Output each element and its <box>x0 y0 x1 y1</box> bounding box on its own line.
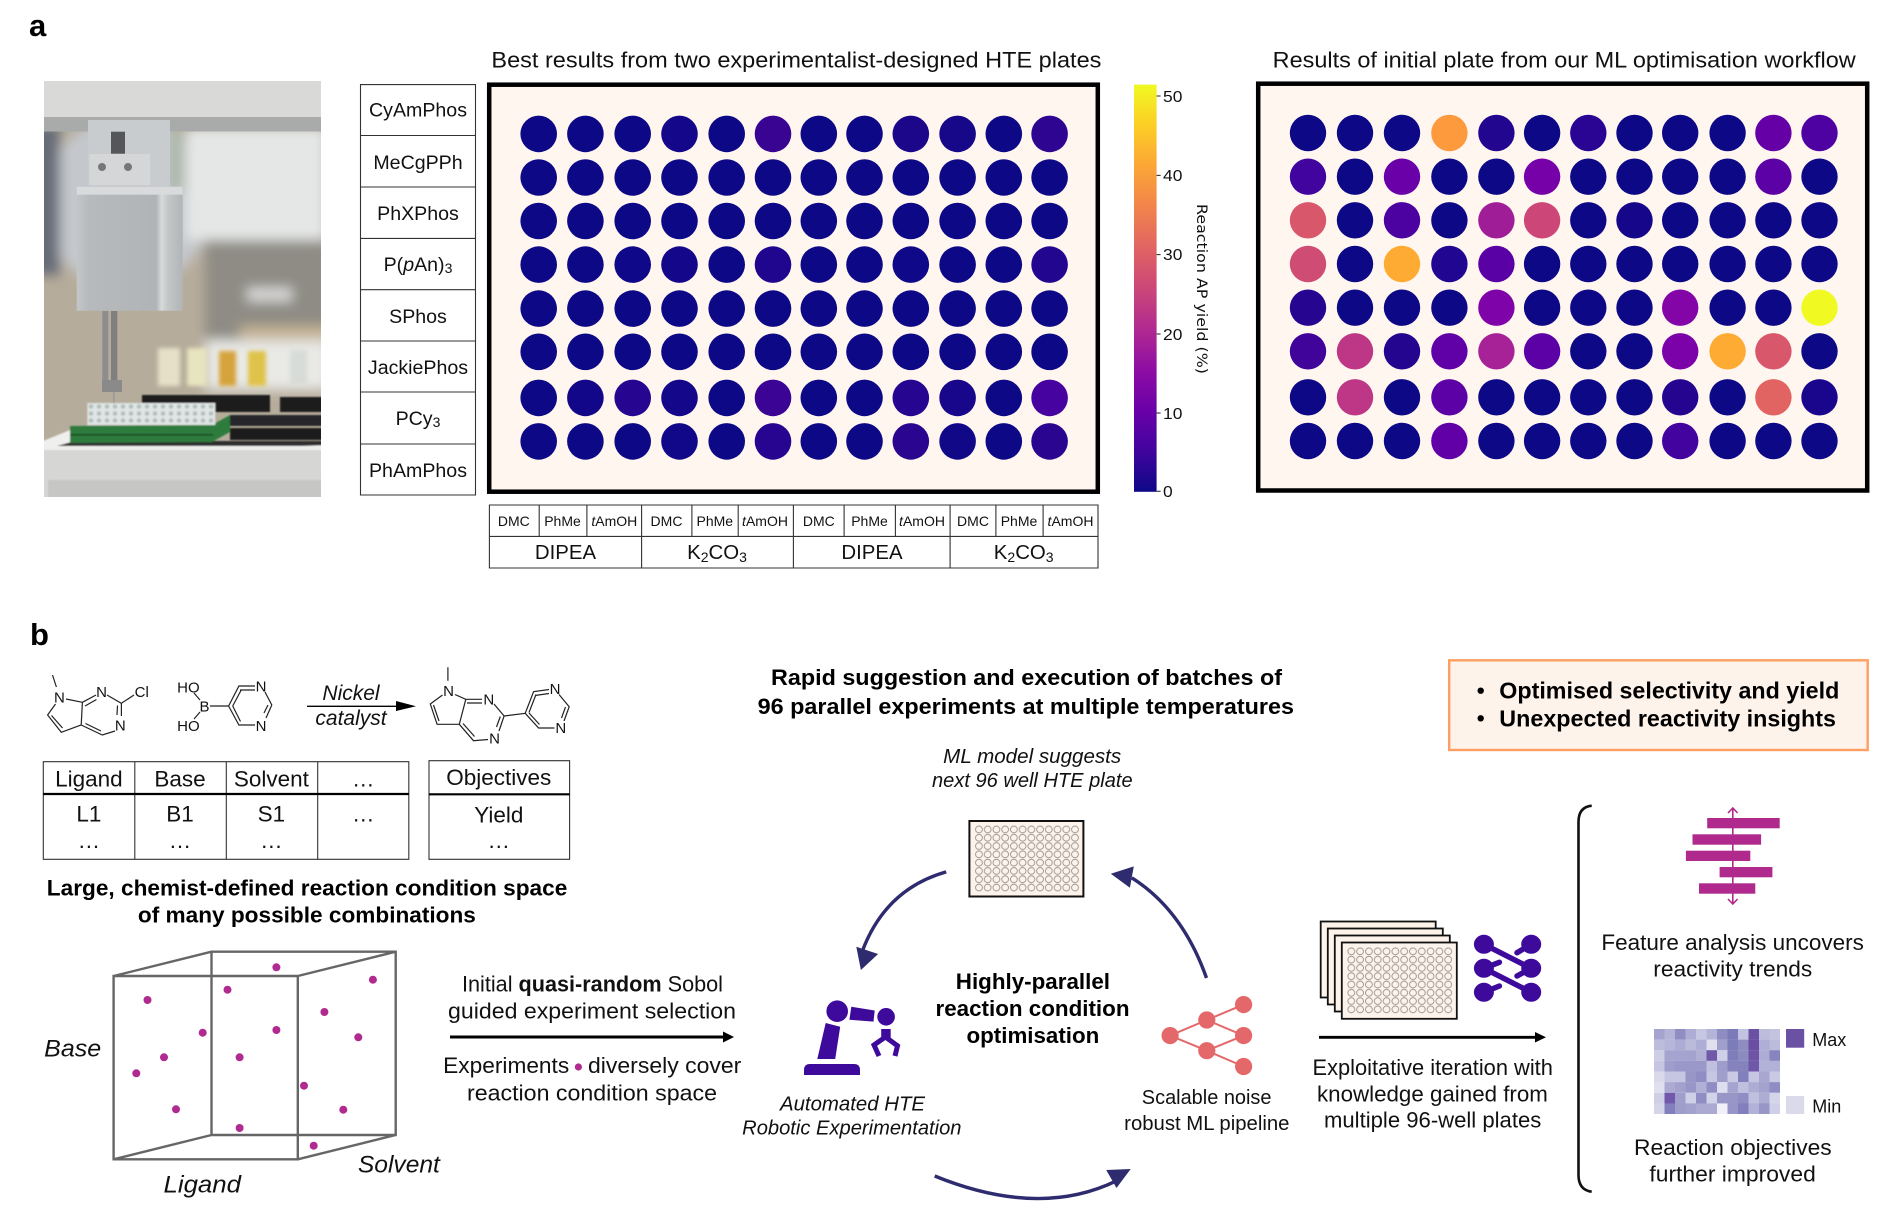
ligand label column: PhAmPhos <box>369 460 467 482</box>
reaction arrow with nickel catalyst: catalyst <box>315 707 388 730</box>
solvent and base table: CO <box>709 542 739 564</box>
text: highly parallel optimisation: Highly-parallel <box>956 969 1110 994</box>
bracket <box>1578 806 1592 1192</box>
solvent and base table: tAmOH <box>591 513 637 529</box>
ligand label column: 3 <box>445 260 453 276</box>
text and arrow: Sobol selection: diversely cover <box>588 1053 741 1078</box>
text: highly parallel optimisation: reaction condition <box>936 996 1130 1021</box>
text: automated HTE: Robotic Experimentation <box>742 1118 962 1140</box>
solvent and base table: K <box>994 542 1007 564</box>
solvent and base table: DMC <box>498 513 530 529</box>
molecule: pyrimidine boronic acid: B <box>199 698 210 716</box>
solvent and base table <box>489 505 1098 568</box>
text: feature analysis: reactivity trends <box>1653 957 1812 982</box>
panel label b: b <box>30 617 49 652</box>
molecule: coupled product: N <box>483 692 494 708</box>
callout: outcomes: Unexpected reactivity insights <box>1499 706 1836 732</box>
title: ML workflow plate: Results of initial plate from our ML optimisation workflow <box>1273 48 1856 73</box>
molecule: pyrimidine boronic acid: HO <box>177 680 200 696</box>
panel label a: a <box>29 8 47 43</box>
solvent and base table: DMC <box>803 513 835 529</box>
panel a: plate results <box>29 8 1867 568</box>
molecule: chloro pyrrolopyrimidine: Cl <box>135 684 149 701</box>
colour bar: reaction AP yield: 10 <box>1163 406 1183 423</box>
colour bar: reaction AP yield: 50 <box>1163 89 1183 106</box>
text: feature analysis: Feature analysis uncovers <box>1601 930 1864 955</box>
plate: experimentalist results heatmap <box>489 85 1098 492</box>
cube: reaction condition space with sampled points: Ligand <box>164 1172 242 1199</box>
molecule: chloro pyrrolopyrimidine <box>48 675 149 735</box>
callout: outcomes <box>1449 660 1868 750</box>
table: objectives <box>429 761 570 859</box>
molecule: pyrimidine boronic acid: N <box>256 718 266 735</box>
cube: reaction condition space with sampled points <box>44 952 441 1199</box>
text: ML model suggests: next 96 well HTE plate <box>932 770 1133 792</box>
ligand label column: PhXPhos <box>377 203 459 225</box>
table: objectives: … <box>488 828 510 853</box>
arrow: pipeline to plate <box>1111 866 1206 978</box>
title: experimentalist plates: Best results from two experimentalist-designed HTE plates <box>491 48 1101 72</box>
molecule: chloro pyrrolopyrimidine: N <box>54 690 65 706</box>
text: highly parallel optimisation <box>936 969 1130 1048</box>
text: exploitative iteration: Exploitative iteration with <box>1312 1055 1553 1080</box>
arrow: robot to pipeline <box>935 1169 1131 1199</box>
callout: outcomes: Optimised selectivity and yield <box>1499 678 1839 704</box>
solvent and base table: K <box>687 542 701 564</box>
table: objectives: Objectives <box>446 765 551 790</box>
colour bar: reaction AP yield: 30 <box>1163 247 1183 264</box>
table: reaction conditions: … <box>78 828 100 853</box>
colour bar: reaction AP yield: Reaction AP yield (%) <box>1193 204 1209 374</box>
solvent and base table: 2 <box>701 549 709 565</box>
cube: reaction condition space with sampled points: Solvent <box>358 1152 441 1179</box>
table: reaction conditions: … <box>169 828 191 853</box>
table: reaction conditions <box>43 762 409 859</box>
icon: 96 well plate <box>969 821 1083 896</box>
heatmap: reaction objectives: Max <box>1812 1030 1846 1050</box>
arrow head: iteration <box>1535 1032 1546 1042</box>
colour bar: reaction AP yield <box>1134 85 1209 501</box>
ligand label column: 3 <box>433 414 441 430</box>
colour bar: reaction AP yield: 20 <box>1163 327 1183 344</box>
ligand label column: PCy <box>396 408 433 430</box>
ligand label column: MeCgPPh <box>373 152 463 174</box>
heading: reaction condition space: of many possible combinations <box>138 903 476 928</box>
heading: reaction condition space <box>47 875 567 928</box>
molecule: coupled product <box>430 667 569 748</box>
arrow: plate to robot <box>856 872 946 970</box>
icon: stacked well plates <box>1321 922 1457 1019</box>
colour bar: reaction AP yield: 40 <box>1163 168 1183 185</box>
solvent and base table: tAmOH <box>1048 513 1093 529</box>
text: reaction objectives <box>1634 1135 1832 1187</box>
molecule: coupled product: N <box>443 683 454 700</box>
solvent and base table: DMC <box>651 513 682 529</box>
panel b: workflow <box>30 617 1868 1199</box>
solvent and base table: tAmOH <box>742 513 788 529</box>
heatmap: reaction objectives <box>1654 1029 1846 1116</box>
table: reaction conditions: Base <box>154 767 206 792</box>
text and arrow: Sobol selection: Initial quasi-random Sobol <box>462 972 723 997</box>
text: highly parallel optimisation: optimisation <box>966 1023 1099 1048</box>
solvent and base table: PhMe <box>697 513 733 529</box>
table: reaction conditions: L1 <box>76 802 101 827</box>
heatmap: reaction objectives: Min <box>1812 1096 1841 1116</box>
colour bar: reaction AP yield: 0 <box>1163 484 1173 501</box>
solvent and base table: tAmOH <box>899 513 945 529</box>
arrow: iteration <box>1319 1036 1538 1039</box>
table: reaction conditions: Ligand <box>55 767 123 792</box>
text: ML pipeline <box>1124 1087 1290 1135</box>
text: feature analysis <box>1601 930 1864 982</box>
molecule: pyrimidine boronic acid <box>177 678 272 735</box>
table: reaction conditions: Solvent <box>234 767 310 792</box>
solvent and base table: DMC <box>957 513 989 529</box>
text: exploitative iteration: knowledge gained from <box>1317 1082 1548 1107</box>
ligand label column: SPhos <box>389 306 447 328</box>
solvent and base table: DIPEA <box>535 542 596 564</box>
solvent and base table: 3 <box>1046 549 1054 565</box>
table: reaction conditions: S1 <box>258 802 285 827</box>
text: ML model suggests <box>932 746 1133 792</box>
text: reaction objectives: Reaction objectives <box>1634 1135 1832 1160</box>
text: reaction objectives: further improved <box>1649 1162 1816 1187</box>
heading: rapid suggestion: 96 parallel experiments at multiple temperatures <box>758 694 1294 719</box>
plate: ML initial results heatmap <box>1258 84 1867 490</box>
ligand label column: P(pAn) <box>384 254 445 276</box>
table: reaction conditions: … <box>260 828 283 853</box>
molecule: pyrimidine boronic acid: N <box>256 678 266 696</box>
icon: neural network <box>1162 996 1252 1075</box>
text: ML model suggests: ML model suggests <box>943 746 1121 768</box>
solvent and base table: PhMe <box>544 513 581 529</box>
icon: knowledge transfer network <box>1474 935 1541 1002</box>
solvent and base table: 3 <box>739 549 747 565</box>
text and arrow: Sobol selection: Experiments <box>443 1053 569 1078</box>
solvent and base table: 2 <box>1007 549 1015 565</box>
heading: reaction condition space: Large, chemist-defined reaction condition space <box>47 875 567 900</box>
text: automated HTE: Automated HTE <box>779 1094 926 1116</box>
reaction scheme <box>48 667 569 748</box>
text and arrow: Sobol selection <box>443 972 741 1106</box>
solvent and base table: DIPEA <box>841 542 903 564</box>
photo: liquid handling robot <box>30 81 330 504</box>
table: reaction conditions: … <box>352 767 375 792</box>
ligand label column: CyAmPhos <box>369 100 467 122</box>
molecule: coupled product: N <box>555 720 566 737</box>
cube: reaction condition space with sampled points: Base <box>44 1036 101 1063</box>
text: exploitative iteration: multiple 96-well plates <box>1324 1107 1541 1132</box>
icon: feature analysis bars <box>1686 808 1780 904</box>
text and arrow: Sobol selection: guided experiment selection <box>448 999 736 1024</box>
text: ML pipeline: robust ML pipeline <box>1124 1113 1290 1135</box>
molecule: coupled product: N <box>489 730 500 748</box>
table: reaction conditions: B1 <box>166 802 194 827</box>
icon: robot arm <box>804 1000 898 1075</box>
molecule: coupled product: N <box>550 681 560 698</box>
heading: rapid suggestion <box>758 665 1294 719</box>
solvent and base table: PhMe <box>1001 513 1037 529</box>
ligand label column <box>360 85 476 495</box>
text and arrow: Sobol selection: reaction condition space <box>467 1081 717 1106</box>
molecule: pyrimidine boronic acid: HO <box>177 718 200 735</box>
reaction arrow with nickel catalyst: Nickel <box>322 682 381 705</box>
ligand label column: JackiePhos <box>368 357 468 379</box>
molecule: chloro pyrrolopyrimidine: N <box>96 684 107 701</box>
text: automated HTE <box>742 1094 962 1140</box>
text: exploitative iteration <box>1312 1055 1553 1132</box>
heading: rapid suggestion: Rapid suggestion and execution of batches of <box>771 665 1283 690</box>
text: ML pipeline: Scalable noise <box>1142 1087 1272 1109</box>
solvent and base table: CO <box>1015 542 1046 564</box>
reaction arrow with nickel catalyst <box>307 682 416 730</box>
table: reaction conditions: … <box>352 802 375 827</box>
table: objectives: Yield <box>474 803 523 828</box>
solvent and base table: PhMe <box>851 513 888 529</box>
molecule: chloro pyrrolopyrimidine: N <box>115 718 126 734</box>
